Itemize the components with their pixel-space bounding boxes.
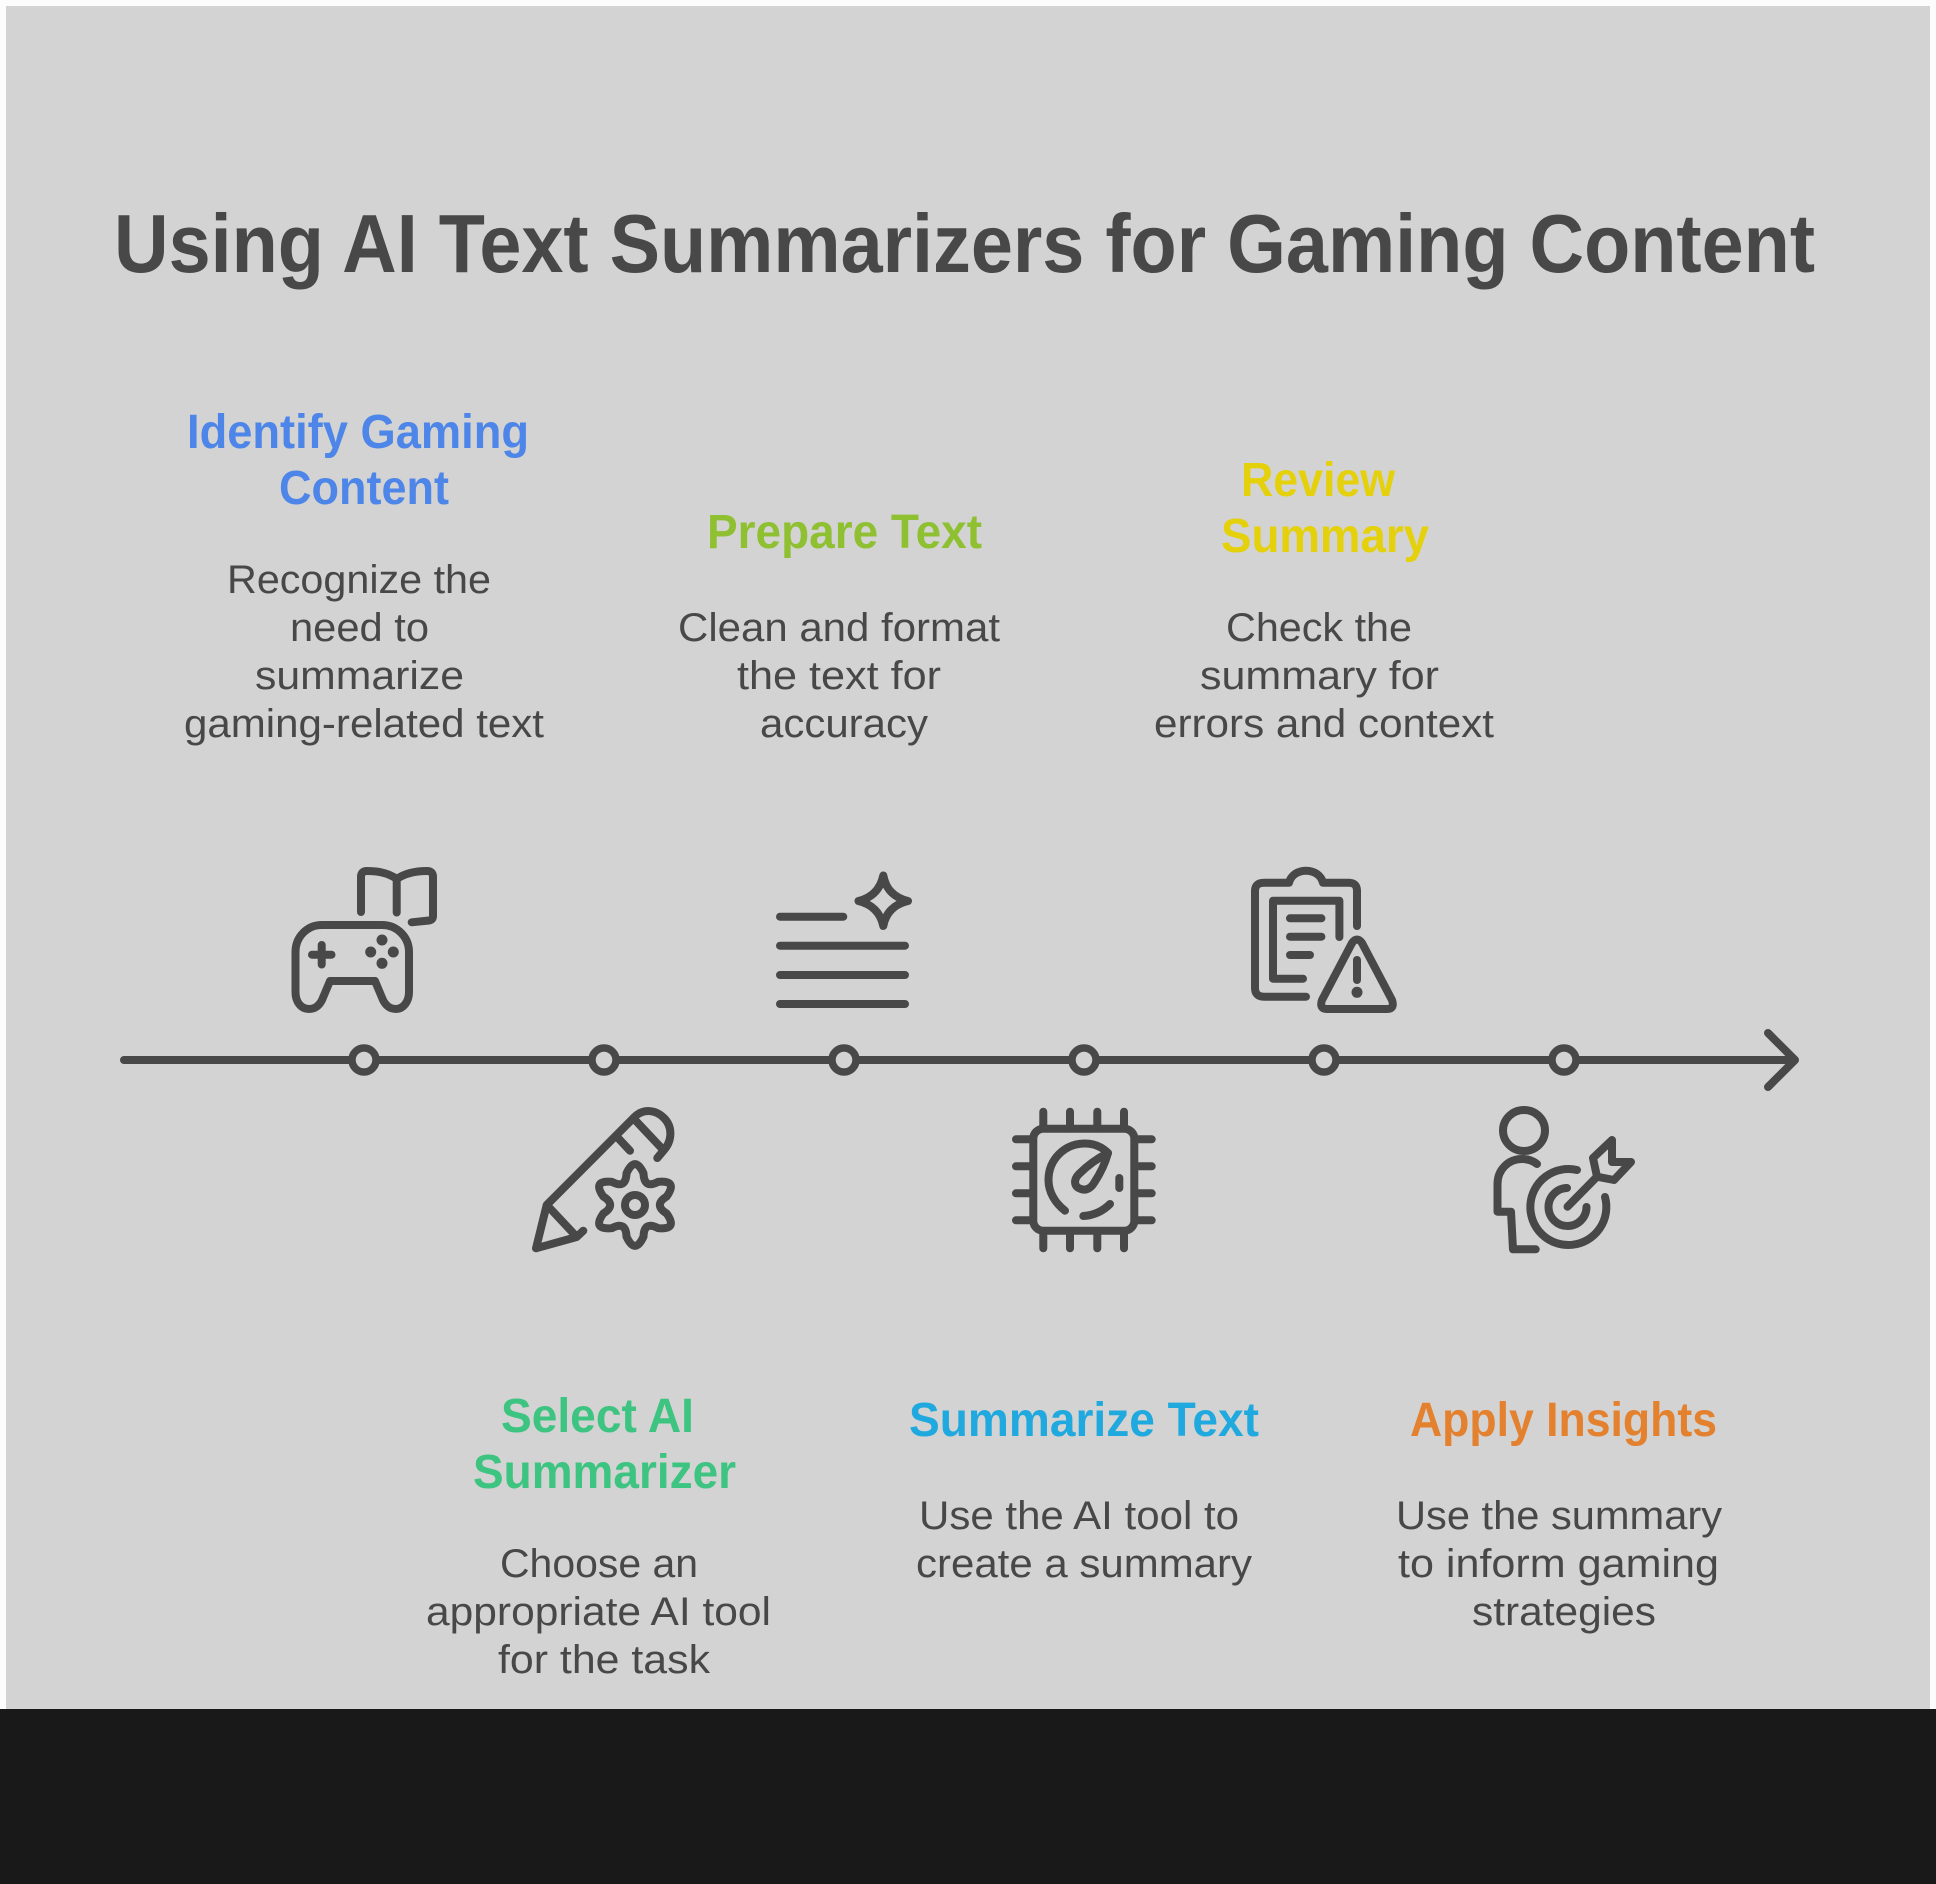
step 1 text: Identify Gaming Content	[184, 406, 544, 746]
heading: Identify Gaming Content: Identify Gaming	[187, 406, 529, 459]
description: step 2: appropriate AI tool	[426, 1590, 771, 1634]
description: step 6: Use the summary	[1396, 1494, 1722, 1538]
heading: Summarize Text: Summarize Text	[909, 1394, 1259, 1447]
heading: Review Summary	[1221, 454, 1429, 563]
footer: black bar	[0, 1709, 1936, 1884]
description: step 1: gaming-related text	[184, 702, 544, 746]
description: step 1	[184, 558, 544, 746]
step 5 text: Review Summary	[1154, 454, 1494, 746]
arrow line and head	[124, 1033, 1795, 1087]
description: step 6: strategies	[1472, 1590, 1656, 1634]
description: step 5: Check the	[1226, 606, 1412, 650]
step 2 text: Select AI Summarizer	[426, 1390, 771, 1682]
heading: Identify Gaming Content	[187, 406, 529, 515]
timeline arrow with nodes	[124, 1033, 1795, 1087]
description: step 2: for the task	[498, 1638, 711, 1682]
step 3 text: Prepare Text	[678, 506, 1000, 746]
step 6 text: Apply Insights	[1396, 1394, 1722, 1634]
heading: Select AI Summarizer: Summarizer	[473, 1446, 736, 1499]
icon: person with target and arrow	[1498, 1110, 1631, 1249]
heading: Review Summary: Review	[1241, 454, 1396, 507]
description: step 4: Use the AI tool to	[919, 1494, 1239, 1538]
heading: Apply Insights: Apply Insights	[1410, 1394, 1717, 1447]
description: step 3	[678, 606, 1000, 746]
title: Using AI Text Summarizers for Gaming Content	[114, 197, 1815, 290]
description: step 5	[1154, 606, 1494, 746]
heading: Review Summary: Summary	[1221, 510, 1429, 563]
heading: Select AI Summarizer: Select AI	[501, 1390, 694, 1443]
description: step 3: the text for	[737, 654, 941, 698]
icon: pencil with gear	[536, 1111, 671, 1248]
description: step 5: summary for	[1200, 654, 1439, 698]
description: step 4	[916, 1494, 1252, 1586]
description: step 3: accuracy	[760, 702, 928, 746]
heading: Select AI Summarizer	[473, 1390, 736, 1499]
description: step 2: Choose an	[500, 1542, 698, 1586]
timeline nodes	[352, 1048, 1576, 1072]
heading: Identify Gaming Content: Content	[279, 462, 449, 515]
step 4 text: Summarize Text	[909, 1394, 1259, 1586]
description: step 6: to inform gaming	[1398, 1542, 1719, 1586]
description: step 1: Recognize the	[227, 558, 491, 602]
heading: Prepare Text: Prepare Text	[707, 506, 982, 559]
description: step 4: create a summary	[916, 1542, 1252, 1586]
icon: processor chip with gauge	[1016, 1112, 1152, 1248]
description: step 3: Clean and format	[678, 606, 1000, 650]
description: step 5: errors and context	[1154, 702, 1494, 746]
description: step 2	[426, 1542, 771, 1682]
icon: game controller with book	[296, 871, 433, 1009]
description: step 6	[1396, 1494, 1722, 1634]
description: step 1: summarize	[255, 654, 464, 698]
description: step 1: need to	[290, 606, 429, 650]
icon: text lines with sparkle	[780, 876, 908, 1004]
icon: clipboard with warning triangle	[1255, 871, 1393, 1009]
